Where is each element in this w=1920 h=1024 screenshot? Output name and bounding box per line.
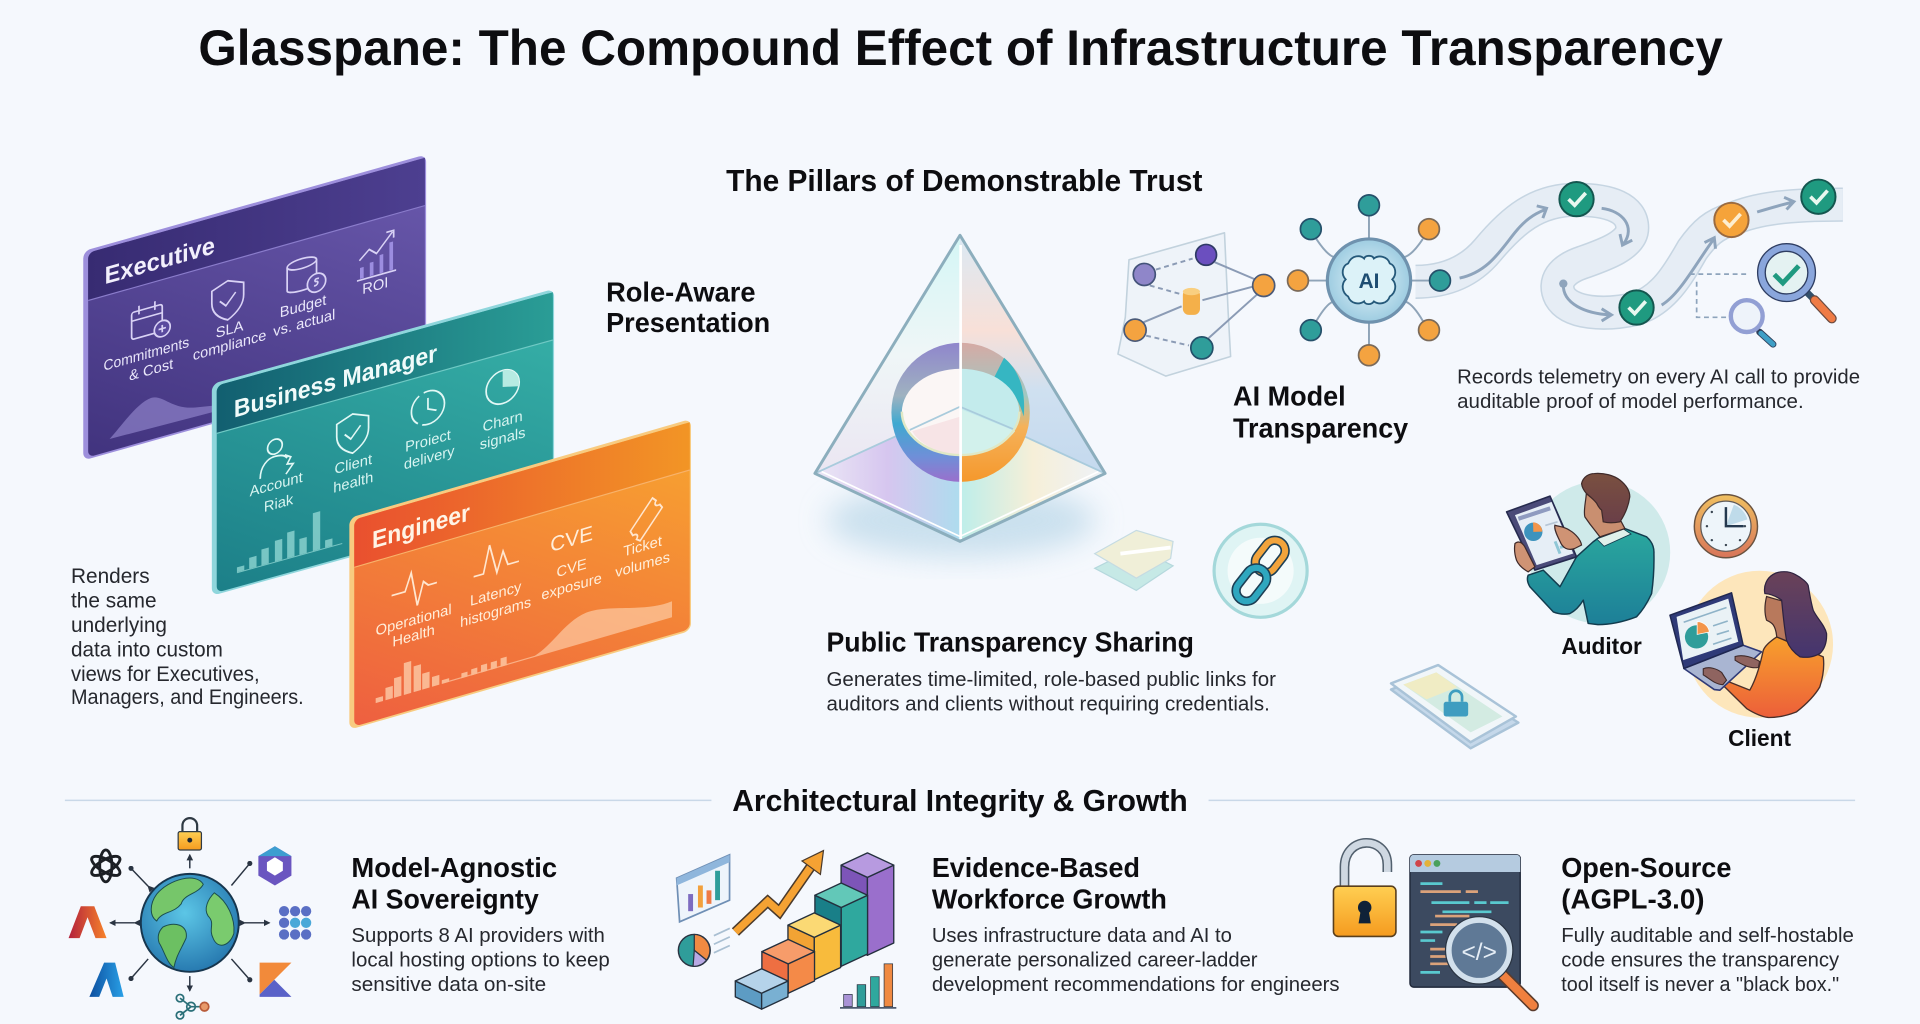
text block: role-aware description: underlying [71, 614, 167, 637]
heading: pillars of demonstrable trust: The Pillars of Demonstrable Trust [726, 164, 1202, 198]
icon: growth staircase chart [677, 851, 896, 1009]
text block: workforce growth description: development recommendations for engineers [932, 974, 1340, 996]
icon: dot grid provider [279, 906, 311, 940]
prism shadow [827, 484, 1096, 557]
text block: role-aware description: Managers, and Engineers. [71, 686, 304, 709]
label: ticket volumes: volumes [615, 549, 670, 581]
icon: padlock [178, 818, 201, 850]
label: latency histograms: histograms [460, 594, 531, 631]
label: client health [333, 451, 373, 497]
text block: model-agnostic description [351, 925, 610, 996]
card title: business manager: Business Manager [234, 339, 437, 423]
checkpoint: green two [1619, 290, 1654, 325]
text block: open-source description: tool itself is never a "black box." [1561, 974, 1839, 996]
mini pie [678, 928, 730, 966]
bar chart: business [237, 505, 342, 573]
text block: workforce growth description: generate personalized career-ladder [932, 949, 1258, 971]
label: account risk [250, 469, 303, 520]
icon: k provider [260, 963, 291, 997]
icon: red a provider [69, 906, 107, 938]
icon: calendar cost [132, 297, 170, 345]
diagram: data flow panel [1118, 233, 1275, 376]
heading: model-agnostic ai sovereignty: AI Sovereignty [351, 884, 539, 915]
heading: evidence-based workforce growth [932, 852, 1167, 915]
text block: model-agnostic description: local hosting options to keep [351, 949, 610, 971]
text block: telemetry description: auditable proof of model performance. [1457, 391, 1804, 413]
label: latency histograms [460, 576, 531, 631]
heading: ai model transparency: AI Model [1233, 380, 1346, 411]
heading: role-aware presentation [606, 276, 770, 338]
heading: evidence-based workforce growth: Workforce Growth [932, 884, 1167, 915]
heading: model-agnostic ai sovereignty: Model-Agnostic [351, 852, 557, 883]
text block: telemetry description: Records telemetry on every AI call to provide [1457, 366, 1860, 388]
label: project delivery: delivery [404, 443, 455, 473]
text block: public sharing description: auditors and clients without requiring credentials. [827, 693, 1270, 715]
label: budget vs actual [273, 289, 335, 340]
icon: large magnifier [1758, 244, 1832, 319]
icon: globe with ai providers [69, 818, 311, 1019]
heading: open-source agpl: (AGPL-3.0) [1561, 884, 1704, 915]
heading: architectural integrity and growth: Architectural Integrity & Growth [732, 784, 1188, 818]
text block: role-aware description: data into custom [71, 638, 223, 661]
heading: role-aware presentation: Presentation [606, 307, 770, 338]
label: client: Client [1728, 725, 1791, 751]
heading: ai model transparency [1233, 380, 1409, 443]
text block: telemetry description [1457, 366, 1860, 413]
icon: code window with magnifier: </> [1461, 939, 1497, 966]
icon: ai brain hub: AI [1359, 270, 1379, 293]
label: project delivery [404, 425, 455, 473]
icon: ai brain hub [1288, 195, 1450, 366]
icon: phone with lock [1391, 665, 1518, 748]
icon: knot provider [89, 850, 123, 882]
icon: small magnifier [1731, 300, 1773, 344]
text block: role-aware description: the same [71, 590, 157, 613]
label: latency histograms: Latency [470, 578, 522, 610]
card title: executive: Executive [105, 232, 215, 290]
text block: role-aware description [71, 565, 304, 709]
icon: hexagon provider [258, 846, 291, 885]
label: churn signals: Charn [483, 408, 523, 436]
mini bars [840, 964, 896, 1008]
label: roi: ROI [362, 274, 388, 298]
text block: open-source description: Fully auditable and self-hostable [1561, 925, 1854, 947]
label: cve exposure: exposure [541, 570, 602, 604]
panel: engineer card [349, 419, 691, 730]
divider left [65, 799, 711, 801]
label: sla compliance: SLA [216, 317, 243, 342]
heading: evidence-based workforce growth: Evidence-Based [932, 852, 1140, 883]
panel: executive card [83, 154, 426, 460]
diagram: telemetry ribbon [1416, 180, 1843, 325]
icon: churn pie [486, 366, 519, 408]
text block: role-aware description: Renders [71, 565, 150, 588]
divider right [1209, 799, 1855, 801]
icon: budget [287, 252, 326, 300]
checkpoint: green one [1559, 182, 1594, 216]
icon: ticket [630, 495, 662, 544]
label: commitments and cost: & Cost [129, 355, 174, 385]
label: account risk: Riak [264, 491, 294, 516]
label: client health: Client [334, 451, 373, 478]
label: ticket volumes [615, 530, 670, 581]
heading: public transparency sharing: Public Transparency Sharing [827, 627, 1194, 658]
area chart: executive [110, 378, 222, 441]
title: Glasspane: The Compound Effect of Infrastructure Transparency [198, 20, 1723, 76]
heading: ai model transparency: Transparency [1233, 412, 1409, 443]
label: churn signals: signals [480, 424, 526, 454]
chart: engineer histogram and area [376, 585, 672, 703]
icon: sla shield [212, 276, 244, 324]
panel: business manager card [212, 289, 554, 596]
icon: glass prism with ring [815, 235, 1105, 541]
label: account risk: Account [250, 469, 303, 500]
icon: open padlock [1333, 843, 1396, 936]
label: churn signals [480, 407, 526, 454]
label: cve exposure: CVE [556, 556, 587, 581]
checkpoint: orange [1714, 203, 1749, 237]
heading: open-source agpl: Open-Source [1561, 852, 1731, 883]
label: ticket volumes: Ticket [623, 532, 663, 561]
mini dashboard [677, 855, 730, 922]
globe [141, 874, 239, 972]
label: commitments and cost: Commitments [103, 334, 189, 375]
icon: azure a provider [89, 963, 124, 997]
text block: model-agnostic description: Supports 8 AI providers with [351, 925, 605, 947]
checkpoint: green three [1801, 180, 1836, 214]
text block: role-aware description: views for Executives, [71, 663, 260, 686]
spokes [110, 855, 269, 991]
heading: open-source agpl [1561, 852, 1731, 915]
heading: role-aware presentation: Role-Aware [606, 276, 756, 307]
icon: account risk [260, 434, 293, 481]
text block: workforce growth description: Uses infrastructure data and AI to [932, 925, 1232, 947]
icon: pulse [392, 565, 437, 613]
label: auditor: Auditor [1561, 633, 1642, 659]
text block: open-source description [1561, 925, 1854, 996]
figure: auditor [1507, 473, 1670, 625]
growth arrow [735, 851, 823, 932]
text block: workforce growth description [932, 925, 1340, 996]
label: project delivery: Proiect [405, 426, 452, 456]
label: cve exposure [541, 551, 602, 604]
label: commitments and cost [103, 334, 189, 392]
icon: client health shield [337, 410, 369, 458]
icon: roi chart [357, 230, 396, 281]
icon: latency [474, 537, 519, 579]
label: operational health: Operational [376, 601, 452, 640]
stair columns [735, 853, 894, 1009]
icon: clock [1694, 495, 1758, 558]
label: budget vs actual: vs. actual [273, 306, 335, 340]
heading: model-agnostic ai sovereignty [351, 852, 557, 915]
label: budget vs actual: Budget [280, 291, 327, 321]
icon: cve text: CVE [550, 521, 593, 557]
text block: open-source description: code ensures the transparency [1561, 949, 1840, 971]
label: sla compliance: compliance [193, 327, 266, 364]
text block: public sharing description [827, 669, 1276, 715]
text block: public sharing description: Generates time-limited, role-based public links for [827, 669, 1276, 691]
icon: code window with magnifier [1410, 855, 1533, 1005]
icon: project clock [411, 387, 444, 429]
card title: engineer: Engineer [372, 499, 470, 555]
text block: model-agnostic description: sensitive data on-site [351, 974, 546, 996]
icon: glass stack [1095, 530, 1173, 590]
label: operational health: Health [392, 622, 435, 651]
icon: network provider [176, 994, 209, 1019]
label: client health: health [333, 469, 373, 497]
figure: client [1670, 571, 1833, 718]
icon: chain link badge [1214, 524, 1307, 617]
